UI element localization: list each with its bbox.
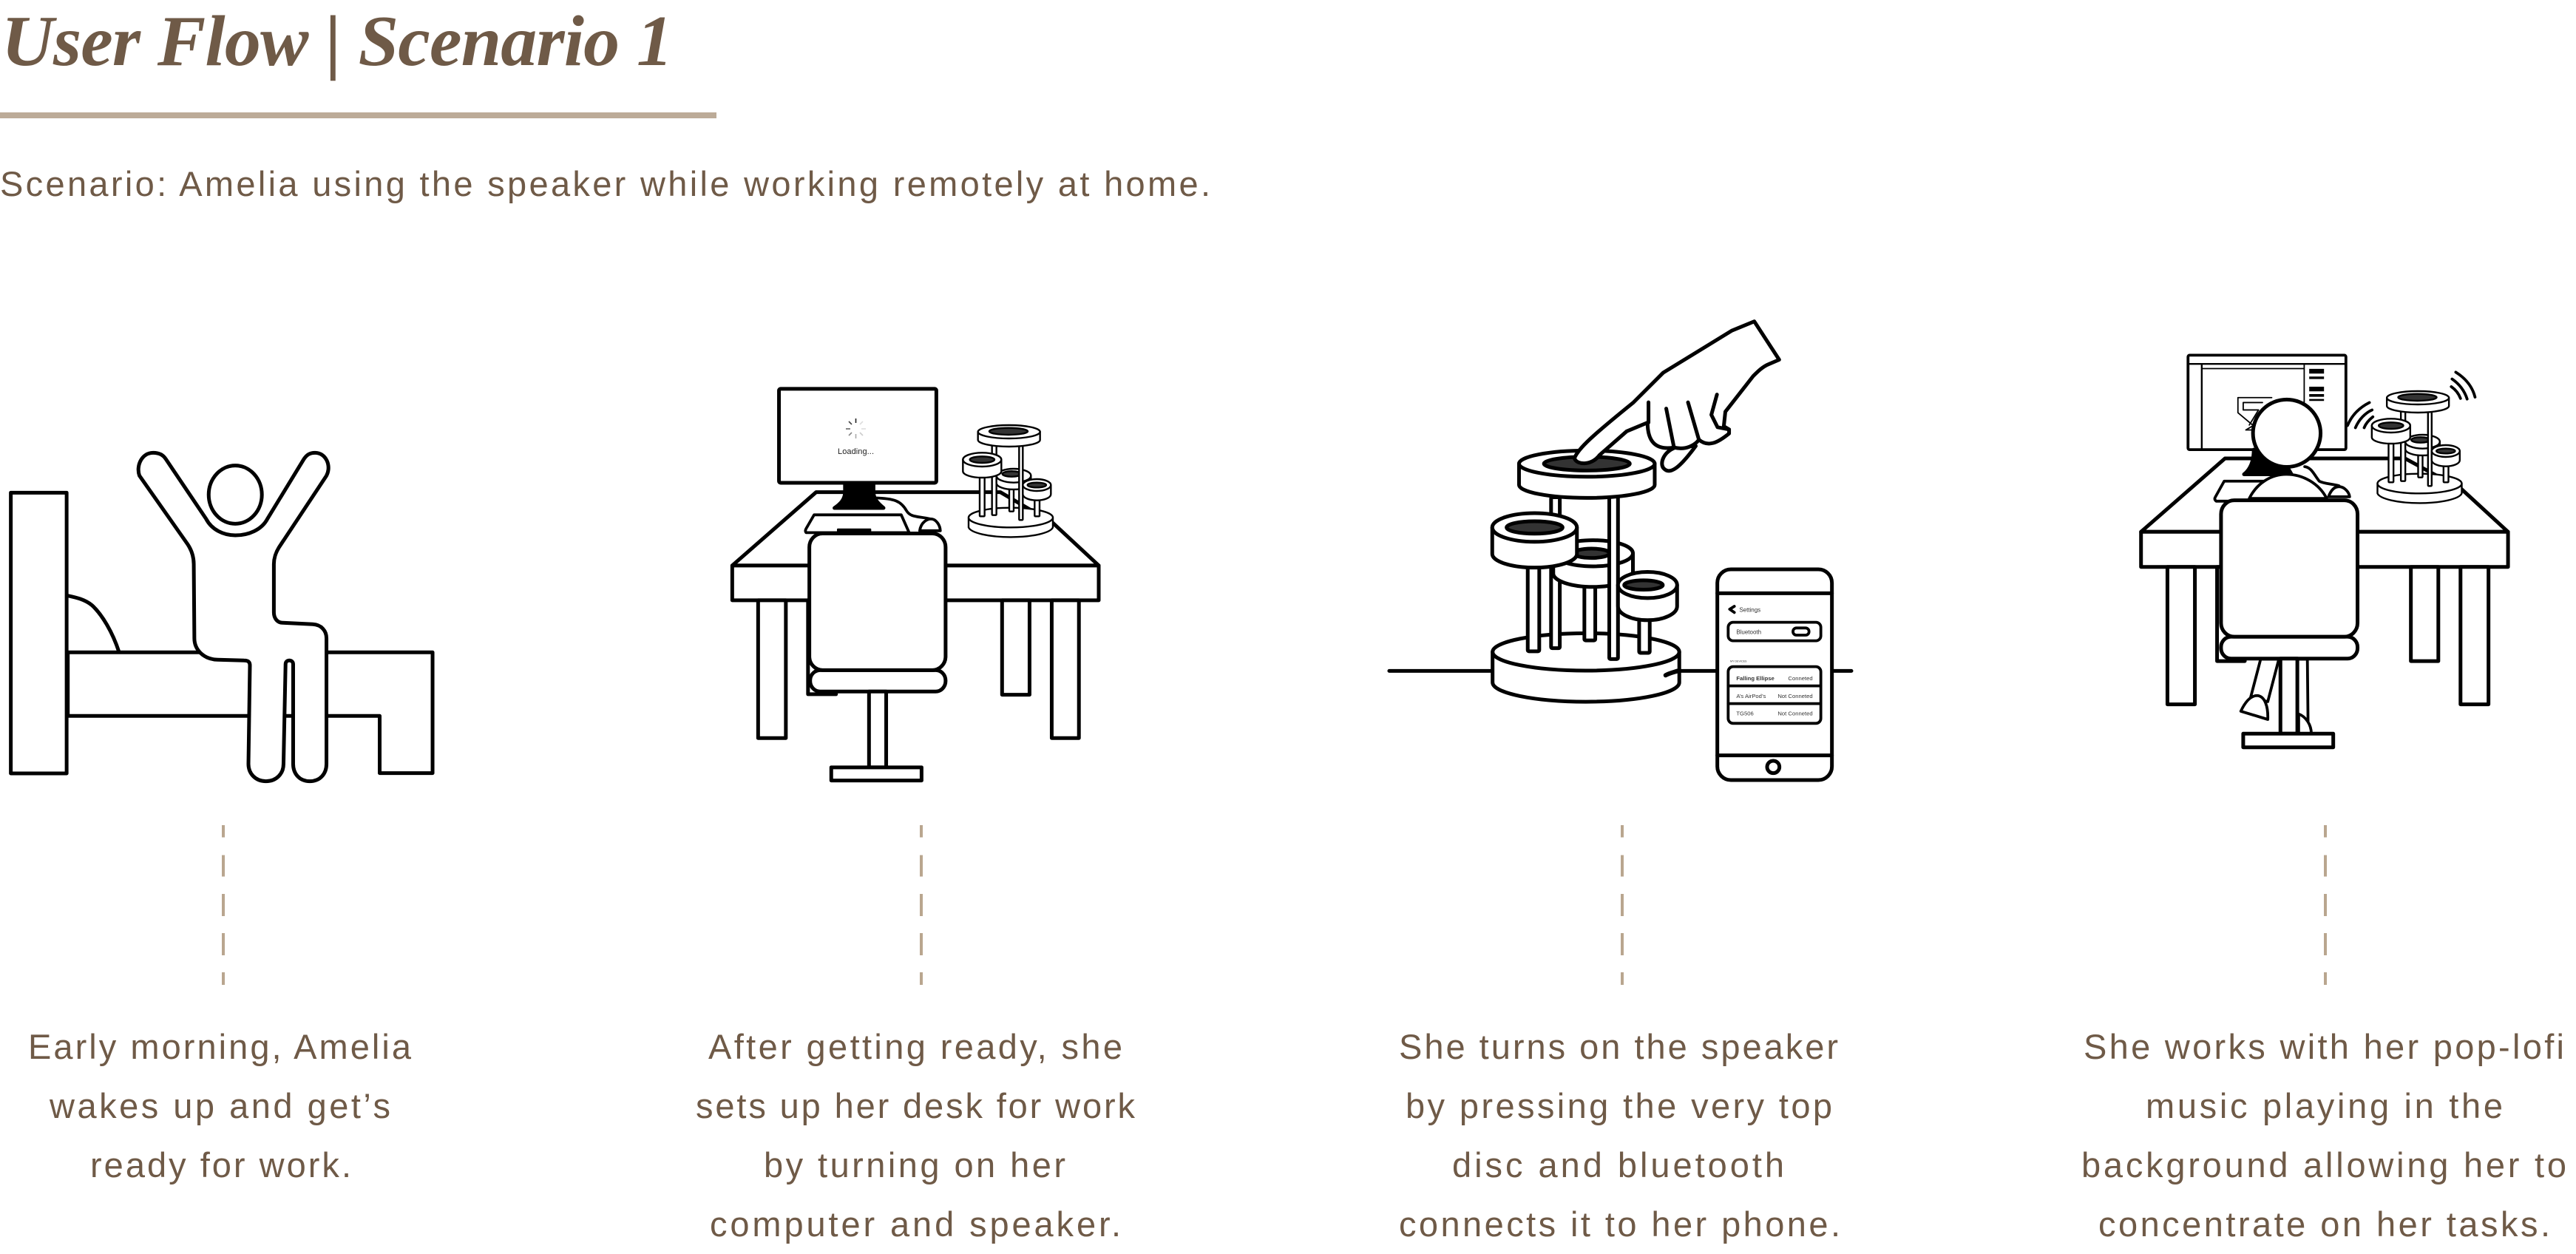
desk top and front [2141,458,2508,532]
scenario subtitle: Scenario: Amelia using the speaker while working remotely at home. [0,164,1210,203]
side panel bars [2309,369,2324,401]
speaker port [1666,671,1678,675]
step 2 caption: sets up her desk for work [696,1086,1136,1125]
phone: Not Conneted [1777,711,1813,717]
step 2 caption: After getting ready, she [708,1027,1122,1066]
step 3 caption: by pressing the very top [1406,1086,1832,1125]
on-screen logo [2238,398,2271,430]
bluetooth row [1728,623,1821,641]
keyboard [2214,481,2299,501]
headboard [11,492,67,773]
chair back [810,533,946,670]
mouse [2328,487,2350,497]
step 1 caption: Early morning, Amelia [28,1027,412,1066]
mouse cable [2305,467,2339,486]
chair seat [2221,637,2358,659]
monitor stand [835,483,884,508]
chair back [2221,501,2358,637]
my devices label: MY DEVICES [1730,660,1747,663]
desk legs [2167,567,2195,705]
chair seat [810,670,946,691]
pillow [68,596,119,652]
title: User Flow | Scenario 1 [1,1,673,81]
chair post [2280,659,2297,733]
step 2 caption: by turning on her [764,1145,1065,1184]
mouse cable [875,498,930,519]
shoes [2241,696,2268,719]
speaker small [2372,391,2461,503]
monitor [779,389,936,483]
sound waves left [2348,402,2373,428]
speaker large [1492,450,1679,702]
step 3 caption: disc and bluetooth [1452,1145,1784,1184]
power cable [1389,669,1851,673]
legs [2251,660,2279,702]
step 2 connector [920,825,923,985]
step 4 connector [2324,825,2327,985]
step 2 illustration: desk with computer and speaker [732,389,1099,781]
step 3 caption [1399,1027,1840,1244]
step 1 connector [222,825,225,985]
phone: Not Conneted [1777,693,1813,699]
chair post [869,691,887,767]
step 3 caption: connects it to her phone. [1399,1204,1840,1244]
bluetooth toggle [1793,628,1809,635]
mouse [920,519,940,531]
home button [1767,761,1780,773]
step 2 caption [696,1027,1136,1244]
step 1 caption: ready for work. [90,1145,351,1184]
step 4 caption: concentrate on her tasks. [2098,1204,2550,1244]
person head [209,466,262,523]
monitor stand [2244,450,2291,474]
step 4 caption [2081,1027,2566,1244]
speaker small [963,425,1053,537]
phone: Falling Ellipse [1736,675,1775,682]
phone: A’s AirPod’s [1736,693,1766,699]
finger lines [1649,395,1729,447]
chair base [2243,733,2333,748]
step 4 caption: She works with her pop-lofi [2084,1027,2564,1066]
loading text: Loading... [838,447,874,456]
step 3 illustration: pressing speaker with phone [1389,322,1851,780]
step 4 caption: background allowing her to [2081,1145,2566,1184]
step 1 caption [28,1027,412,1184]
desk legs [758,600,786,738]
keyboard [805,515,909,532]
phone [1718,569,1832,780]
loading spinner [846,418,866,438]
phone: Conneted [1788,675,1813,682]
step 4 illustration: working with music playing [2141,355,2508,748]
person body [138,453,328,782]
step 3 caption: She turns on the speaker [1399,1027,1838,1066]
step 3 connector [1621,825,1624,985]
desk top and front [732,492,1099,566]
step 2 caption: computer and speaker. [710,1204,1121,1244]
phone: TG506 [1736,711,1754,717]
chair base [831,767,921,781]
back chevron [1729,606,1735,612]
step 4 caption: music playing in the [2146,1086,2503,1125]
head [2253,399,2321,467]
hand [1574,322,1779,464]
thumb [1662,446,1696,471]
step 1 caption: wakes up and get’s [49,1086,390,1125]
settings label: Settings [1739,607,1760,614]
bed frame [68,652,433,773]
shoulders [2249,474,2327,498]
monitor [2188,355,2346,450]
step 1 illustration: waking up on the bed [11,453,433,782]
title underline [0,112,716,118]
phone: Bluetooth [1736,629,1761,636]
sound waves right [2451,372,2475,399]
devices list [1728,667,1821,723]
